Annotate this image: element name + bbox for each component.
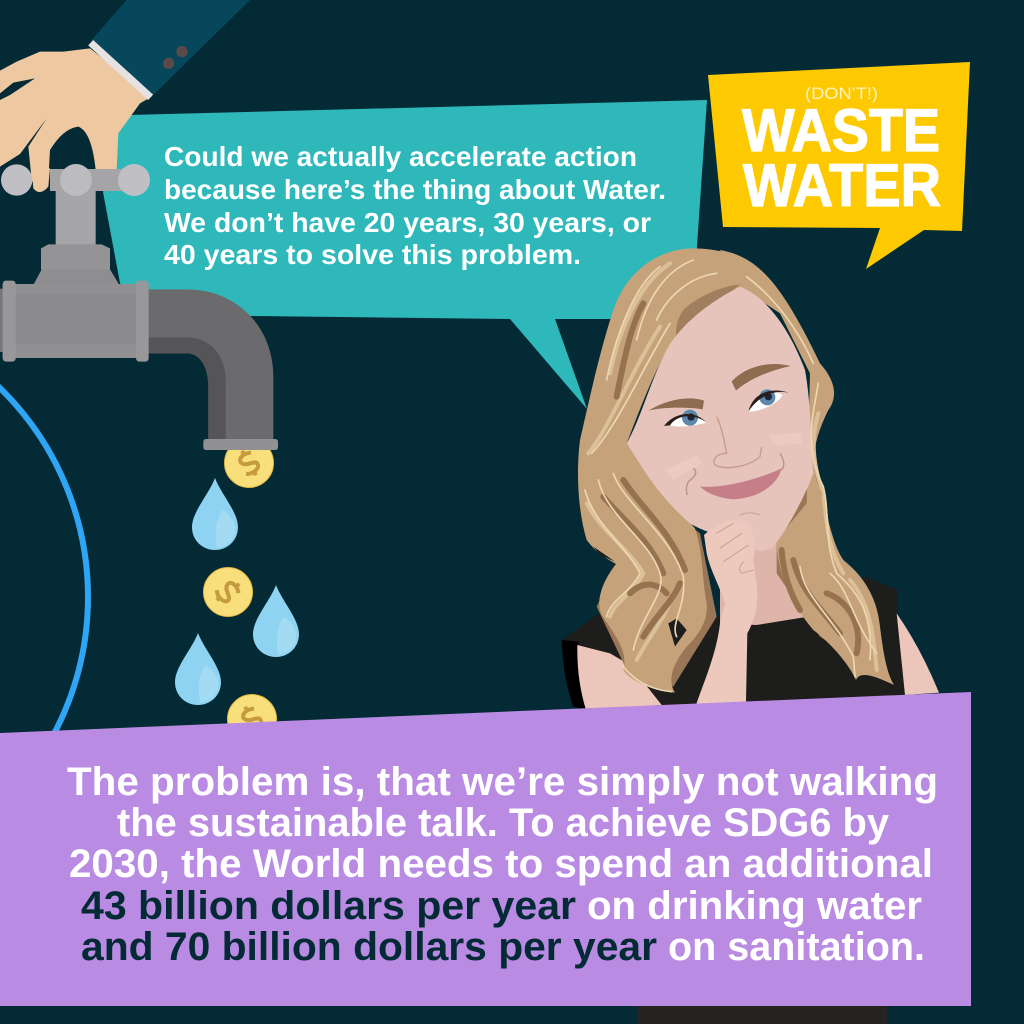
arms <box>577 613 939 710</box>
tap and hand, coordinates at 3x <box>0 0 278 450</box>
left eye <box>664 410 707 427</box>
coin 3 <box>228 694 276 744</box>
hair back shadow <box>597 457 877 687</box>
neck and chest <box>720 500 808 625</box>
hand on chin and forearm <box>696 520 757 705</box>
pipe spout <box>148 289 278 450</box>
hair left mass <box>578 248 747 693</box>
bubble quote text: We don’t have 20 years, 30 years, or <box>164 207 651 238</box>
speech bubble: yellow waste water: WASTE <box>742 97 940 164</box>
falling coins and drops <box>175 438 299 744</box>
coin 2 <box>204 568 252 616</box>
drop 3 <box>175 633 221 705</box>
right eye <box>748 389 789 412</box>
blue circle arc <box>0 305 88 889</box>
tap handle <box>1 164 150 196</box>
clothing below panel <box>637 1006 887 1024</box>
panel paragraph: and 70 billion dollars per year <box>81 925 657 969</box>
hair dark strands <box>603 303 858 653</box>
shirt cuff <box>91 43 151 97</box>
speech bubble: yellow waste water: (DON’T!) <box>805 84 878 103</box>
panel paragraph: the sustainable talk. To achieve SDG6 by <box>117 801 890 845</box>
panel: purple text <box>0 692 971 1006</box>
panel paragraph: on drinking water <box>587 884 922 928</box>
hand finger lines <box>717 513 760 573</box>
hair holes <box>593 547 687 647</box>
face <box>627 287 813 551</box>
drop 1 <box>192 478 238 550</box>
bubble quote text <box>164 141 666 270</box>
mouth <box>700 468 782 499</box>
hand <box>0 48 152 188</box>
drop 2 <box>253 585 299 657</box>
hair parting shadow <box>676 284 740 337</box>
portrait of woman, coordinates at 3x from origin 560,240 <box>562 248 939 713</box>
speech bubble: yellow waste water: WATER <box>743 152 941 219</box>
panel paragraph <box>67 760 938 969</box>
hair mid tone strands <box>587 263 877 670</box>
cheek highlights <box>665 433 802 480</box>
bubble quote text: because here’s the thing about Water. <box>164 174 666 205</box>
suit sleeve <box>92 0 250 95</box>
smile lines <box>686 453 784 495</box>
panel paragraph: The problem is, that we’re simply not walking <box>67 760 938 804</box>
hair light strands <box>585 260 877 692</box>
panel paragraph: 2030, the World needs to spend an additional <box>69 842 933 886</box>
speech bubble: teal <box>103 100 707 409</box>
panel paragraph: on sanitation. <box>668 925 925 969</box>
coin 1 <box>224 438 274 488</box>
tap body <box>0 190 149 362</box>
right eyebrow <box>732 364 791 391</box>
dress <box>562 577 907 713</box>
panel paragraph: 43 billion dollars per year <box>81 884 576 928</box>
hair right mass <box>720 250 894 685</box>
speech bubble: yellow waste water <box>708 62 970 269</box>
nose <box>714 417 762 468</box>
bubble quote text: Could we actually accelerate action <box>164 141 637 172</box>
bubble quote text: 40 years to solve this problem. <box>164 239 581 270</box>
left eyebrow <box>648 398 704 411</box>
